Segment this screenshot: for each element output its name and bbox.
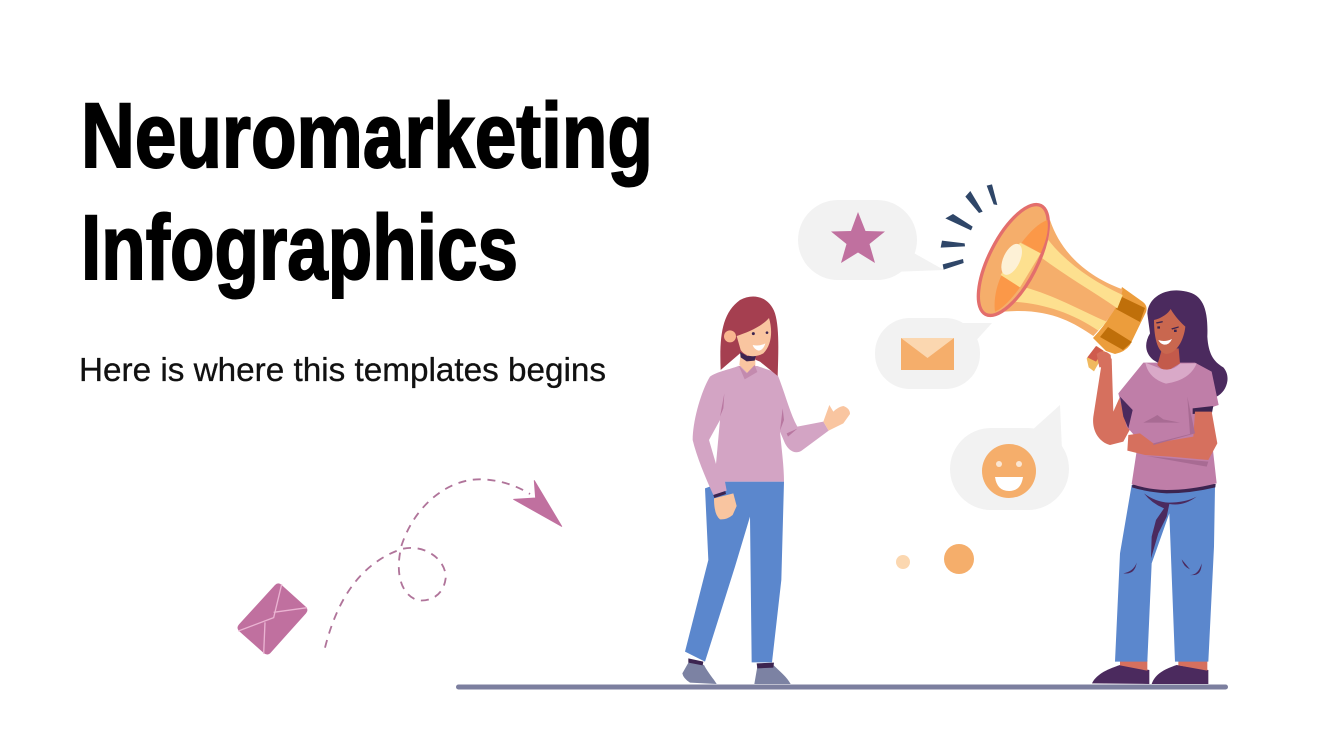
sweater [693, 366, 829, 495]
decorative dots [896, 544, 974, 574]
envelope icon [237, 583, 307, 655]
face [1154, 309, 1185, 354]
ear [724, 330, 736, 342]
subtitle: Here is where this templates begins [79, 351, 606, 388]
speech bubble: smiley [950, 405, 1069, 510]
sweater shading [720, 393, 797, 437]
woman with pink sweater [682, 296, 850, 684]
title: Infographics [81, 197, 518, 299]
choker [740, 352, 756, 361]
shoes [1092, 665, 1208, 684]
megaphone handle and fist [1087, 346, 1105, 371]
interior patches [995, 220, 1048, 312]
title [81, 85, 653, 299]
blouse collar [1145, 363, 1197, 384]
megaphone collar [1093, 287, 1147, 354]
speech bubble: envelope [875, 318, 992, 389]
jeans shading [1123, 493, 1202, 575]
jeans [1115, 485, 1215, 662]
megaphone [964, 195, 1147, 354]
socks [688, 658, 774, 668]
eyebrows and eyes [1156, 321, 1179, 332]
wristband [713, 491, 726, 498]
head [720, 296, 778, 379]
hair [720, 296, 778, 376]
ankles [1120, 660, 1207, 671]
highlight [997, 241, 1026, 278]
sleeve band [1193, 406, 1213, 414]
trousers [685, 482, 784, 662]
smile [1158, 339, 1172, 345]
sound rays [941, 184, 997, 270]
head [1145, 309, 1197, 384]
blouse [1118, 363, 1219, 490]
waistband [1132, 484, 1216, 493]
speech bubble: star [798, 200, 944, 280]
arrow head [514, 481, 562, 526]
face [737, 318, 771, 356]
dashed path [325, 479, 530, 648]
lower hand [714, 493, 737, 519]
woman with megaphone [1087, 290, 1228, 684]
folded arm [1127, 412, 1217, 460]
blouse shading [1143, 397, 1208, 467]
gap between arm and torso [709, 420, 720, 464]
shoes [682, 662, 791, 684]
body [990, 220, 1123, 336]
neck [739, 353, 755, 374]
hair back [1146, 290, 1228, 397]
collar [739, 365, 757, 379]
ground line [456, 684, 1228, 690]
title: Neuromarketing [81, 85, 653, 187]
horn [964, 195, 1123, 336]
raised arm [1093, 358, 1135, 445]
neck [1157, 348, 1180, 372]
icon: envelope [901, 338, 954, 370]
rim [964, 195, 1062, 325]
armpit shadow [1120, 397, 1133, 428]
icon: smiley [982, 444, 1036, 498]
icon: star [831, 212, 885, 263]
raised hand [823, 405, 850, 431]
dashed flight path with envelope and arrow [237, 479, 562, 655]
yellow bands [1040, 240, 1123, 308]
eyes and smile [752, 332, 755, 335]
